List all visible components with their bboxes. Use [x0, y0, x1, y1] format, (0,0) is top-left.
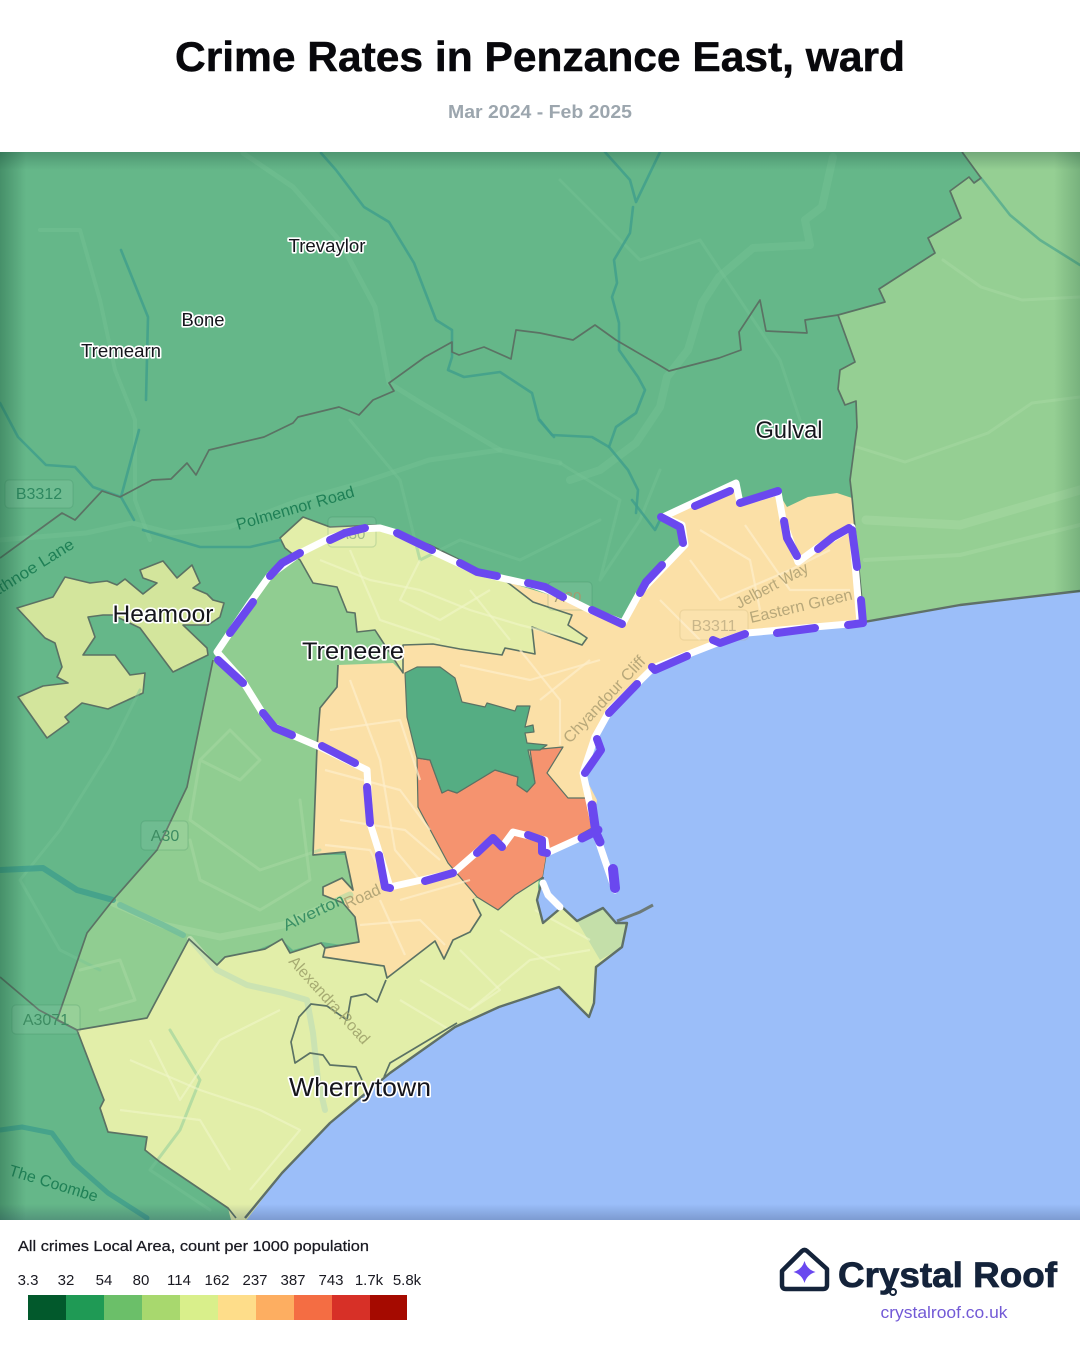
- place labels: Treneere: [302, 638, 404, 665]
- icon: purple star: [794, 1261, 816, 1283]
- legend scale labels: 32: [58, 1272, 74, 1289]
- rivers: [0, 152, 1080, 1218]
- wordmark y tail: [890, 1289, 896, 1295]
- legend scale labels: 54: [96, 1272, 112, 1289]
- road labels: The Coombe: [7, 1163, 100, 1206]
- legend scale labels: 237: [242, 1272, 268, 1289]
- area: central tan: [313, 483, 864, 978]
- road labels: Chyandour Cliff: [560, 653, 650, 747]
- url: crystalroof.co.uk: [880, 1304, 1008, 1322]
- title: Crime Rates in Penzance East, ward: [175, 33, 905, 80]
- area: Wherrytown yellow green: [78, 880, 614, 1220]
- ward outline: purple dashes: [218, 491, 863, 888]
- place labels: Bone: [182, 310, 224, 330]
- ward boundaries on green: [0, 152, 981, 1218]
- harbour pier: [617, 905, 653, 921]
- road shields: A3071: [23, 1012, 69, 1029]
- road shields: B3311: [691, 618, 737, 635]
- place labels: Gulval: [756, 417, 822, 444]
- area: harbour headland: [577, 908, 627, 960]
- place labels: [81, 236, 822, 1102]
- place labels: Trevaylor: [288, 236, 366, 256]
- place labels: Wherrytown: [289, 1072, 431, 1102]
- legend scale labels: 5.8k: [393, 1272, 422, 1289]
- road labels: [0, 484, 854, 1206]
- wordmark: Crystal Roof: [838, 1256, 1057, 1295]
- legend scale labels: 162: [204, 1272, 230, 1289]
- road shields: A30: [339, 526, 365, 543]
- map edge vignette: [0, 152, 1080, 1220]
- road labels: Road: [342, 882, 383, 913]
- water: Mount's Bay: [245, 591, 1080, 1222]
- area: salmon high crime: [417, 747, 592, 910]
- area: Treneere yellow green: [280, 517, 587, 673]
- road shields: A30: [151, 828, 179, 845]
- road labels: Polmennor Road: [234, 484, 356, 534]
- legend title: All crimes Local Area, count per 1000 population: [18, 1238, 369, 1255]
- Crystal Roof logo: [782, 1250, 1057, 1322]
- area: Heamoor: [17, 561, 224, 738]
- place labels: Heamoor: [112, 601, 214, 628]
- legend: [18, 1238, 422, 1320]
- road labels: Jelbert Way: [733, 560, 812, 613]
- streets on tan areas: [325, 525, 850, 955]
- legend scale labels: 743: [318, 1272, 344, 1289]
- legend scale labels: 1.7k: [355, 1272, 384, 1289]
- subtitle: date range: Mar 2024 - Feb 2025: [448, 101, 632, 122]
- road labels: Eastern Green: [748, 587, 854, 627]
- area: west light green around Treneere and A30: [57, 553, 403, 1030]
- area: east light green: [838, 150, 1080, 640]
- legend scale labels: 3.3: [18, 1272, 38, 1289]
- road shields: A30: [555, 589, 581, 606]
- area: central low crime green: [405, 667, 547, 793]
- legend scale labels: 387: [280, 1272, 306, 1289]
- road labels: Alverton: [281, 891, 348, 935]
- road shields: [5, 480, 748, 1034]
- legend scale labels: 114: [167, 1272, 191, 1289]
- legend scale labels: [18, 1272, 422, 1289]
- road shields: B3312: [16, 486, 62, 503]
- legend colour bar: [28, 1295, 407, 1320]
- ward outline: white base: [217, 483, 860, 907]
- icon: house outline: [782, 1250, 827, 1289]
- harbour and shore outline: [245, 877, 627, 1218]
- roads on light green: [80, 260, 1080, 1010]
- coastline: [864, 591, 1080, 622]
- place labels: Tremearn: [81, 341, 161, 361]
- legend scale labels: 80: [133, 1272, 149, 1289]
- streets on Treneere and yellow areas: [120, 550, 590, 1190]
- road labels: Alexandra Road: [285, 953, 373, 1048]
- roads on dark green: [78, 270, 726, 1160]
- area: dark green low crime base: [0, 152, 1080, 1220]
